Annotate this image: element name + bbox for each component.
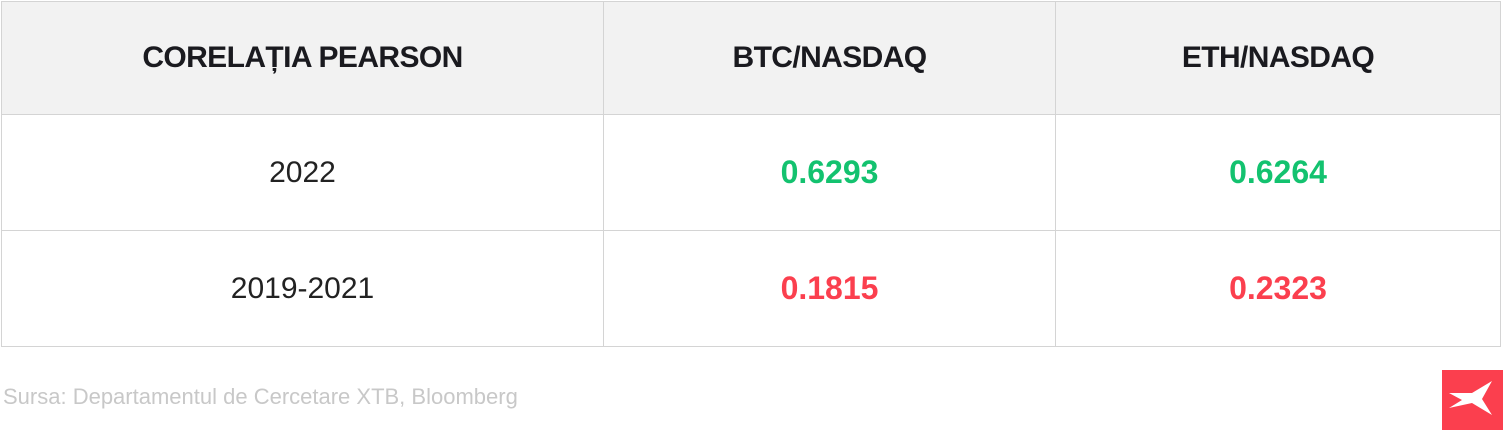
header row — [2, 2, 1500, 306]
row 2019-2021: 2019-2021 — [231, 272, 374, 304]
table: Pearson correlation — [1, 1, 1501, 347]
header row: ETH/NASDAQ — [1182, 41, 1374, 74]
row 2022: 0.6293 — [781, 154, 878, 190]
row 2022 — [269, 154, 1327, 190]
row 2022: 2022 — [269, 156, 336, 188]
row 2022: 0.6264 — [1229, 154, 1327, 190]
row 2019-2021: 0.1815 — [781, 270, 878, 306]
header row: CORELAȚIA PEARSON — [142, 41, 463, 74]
row 2019-2021 — [231, 270, 1327, 306]
row 2019-2021: 0.2323 — [1229, 270, 1327, 306]
header row: BTC/NASDAQ — [732, 41, 926, 74]
source text: Sursa: Departamentul de Cercetare XTB, Bloomberg — [3, 384, 518, 409]
icon: XTB logo — [1442, 370, 1503, 430]
